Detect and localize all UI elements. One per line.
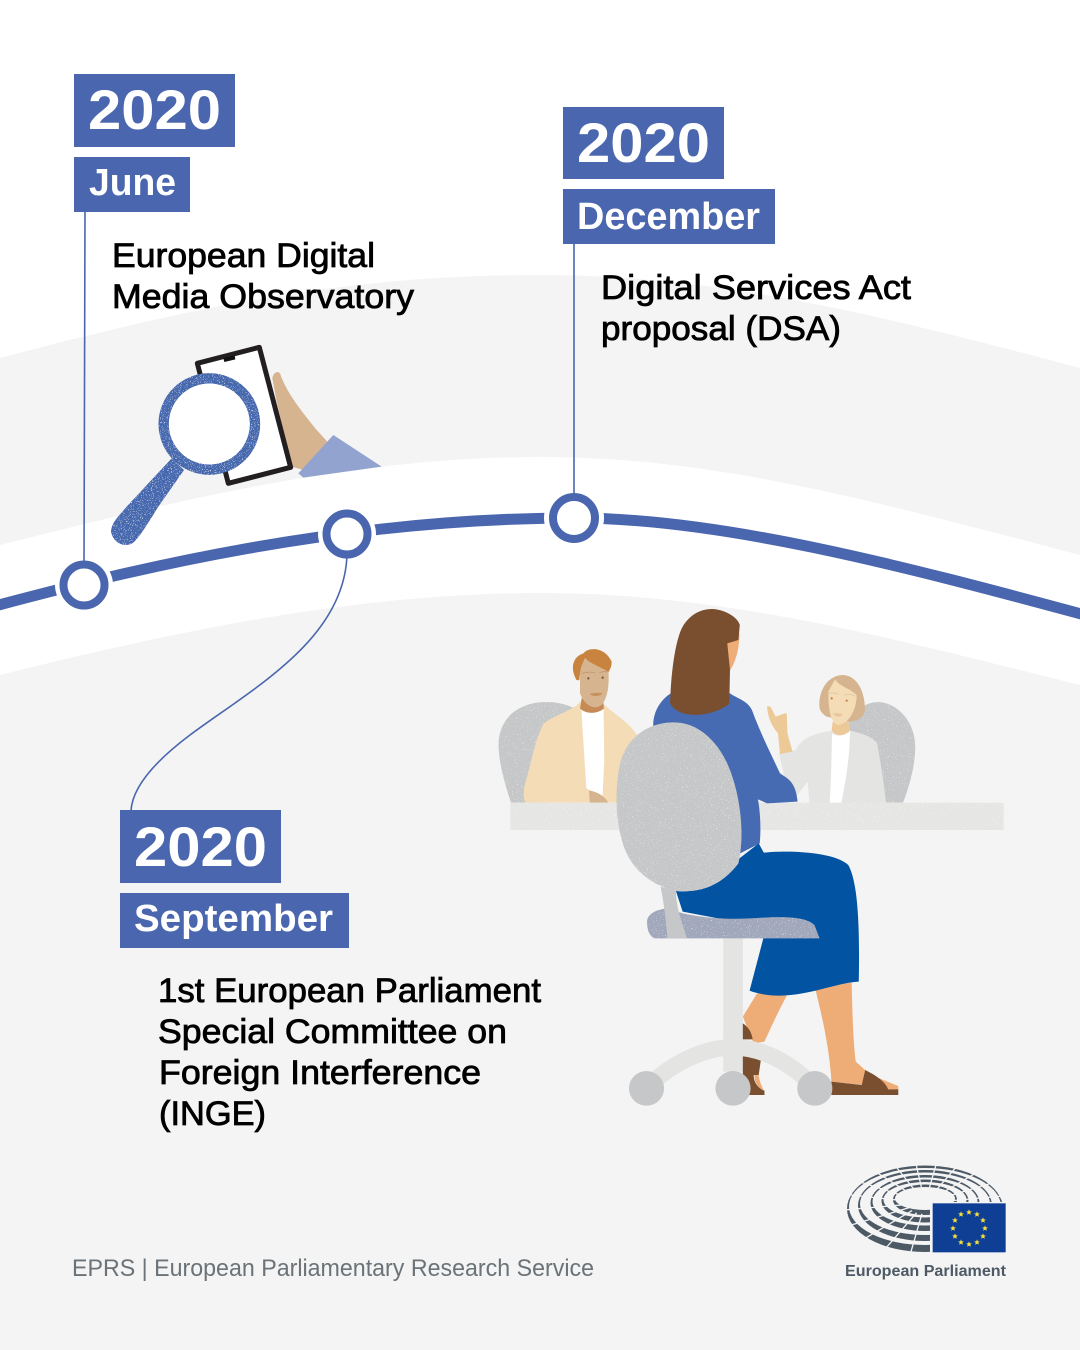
label: 2020 December: December <box>577 196 760 238</box>
woman: skirt <box>676 843 859 996</box>
label: 2020 June <box>74 74 235 212</box>
logo: European Parliament <box>836 1149 1014 1280</box>
hand <box>272 372 327 470</box>
chair column <box>723 938 743 1072</box>
figure: man in chair <box>498 702 637 803</box>
connector: June <box>84 212 85 565</box>
illustration: committee meeting <box>498 609 1004 1106</box>
phone <box>197 347 291 483</box>
label: 2020 June: June <box>89 162 176 204</box>
head: woman facing viewer <box>819 675 865 735</box>
label: 2020 September: September <box>134 898 333 940</box>
head: man <box>573 649 612 713</box>
chair stem <box>661 887 687 938</box>
woman: back leg and shoe <box>743 993 787 1095</box>
text: Special Committee INGE: 1st European Parliament <box>158 972 542 1010</box>
text: Special Committee INGE: Foreign Interference <box>159 1054 481 1092</box>
sleeve <box>298 435 382 478</box>
footer: EPRS credit: EPRS | European Parliamentary Research Service <box>72 1255 594 1282</box>
table <box>510 803 1004 830</box>
timeline line <box>0 488 1080 615</box>
text: Digital Services Act proposal: Digital Services Act <box>601 269 912 307</box>
figure: woman facing viewer <box>767 702 915 803</box>
connector: September <box>131 554 347 811</box>
hemicycle <box>836 1149 1014 1257</box>
woman: front leg and sandal <box>815 983 898 1095</box>
chair back <box>617 722 742 891</box>
label: 2020 December: 2020 <box>577 111 710 174</box>
magnifying glass <box>111 378 255 545</box>
label: 2020 June: 2020 <box>88 78 221 141</box>
chair seat <box>647 908 820 938</box>
icon: hand holding phone with magnifying glass <box>111 347 382 545</box>
connector: December <box>573 244 575 497</box>
text: Digital Services Act proposal <box>601 269 912 348</box>
woman: hair and face <box>670 609 740 715</box>
flag <box>930 1202 1008 1254</box>
text: European Digital Media Observatory: European Digital <box>112 237 375 275</box>
text: European Digital Media Observatory: Media Observatory <box>112 278 414 316</box>
timeline marker: June <box>64 564 104 606</box>
timeline marker: September <box>326 514 368 554</box>
label: 2020 December <box>563 107 775 244</box>
woman: blue top <box>653 693 798 853</box>
text: European Digital Media Observatory <box>112 237 414 316</box>
label: 2020 September <box>120 810 349 948</box>
text: Special Committee INGE <box>158 972 542 1133</box>
text: Special Committee INGE: Special Committee on <box>158 1013 507 1051</box>
chair base <box>629 1047 832 1106</box>
timeline marker: December <box>553 497 595 539</box>
label: 2020 September: 2020 <box>134 815 267 878</box>
text: Special Committee INGE: (INGE) <box>159 1095 266 1133</box>
logo wordmark: European Parliament <box>845 1263 1007 1280</box>
text: Digital Services Act proposal: proposal (DSA) <box>601 310 841 348</box>
